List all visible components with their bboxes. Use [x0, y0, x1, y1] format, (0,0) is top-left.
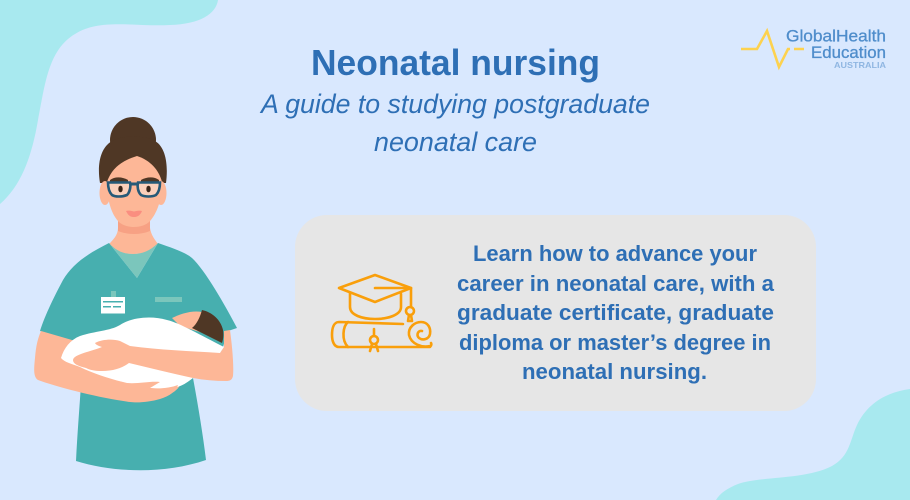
scrub body — [40, 243, 237, 470]
panel: career callout — [295, 215, 816, 411]
callout text: diploma or master’s degree in — [459, 330, 771, 355]
subtitle: A guide to studying postgraduate — [259, 89, 650, 119]
collar — [109, 243, 158, 278]
baby wrap — [61, 318, 224, 389]
baby face — [172, 311, 202, 332]
illustration: nurse holding baby — [34, 117, 237, 470]
subtitle: neonatal care — [374, 127, 537, 157]
ears — [100, 181, 110, 205]
logo: Global Health Education Australia: Education — [811, 43, 886, 62]
subtitle — [259, 89, 650, 157]
hair bun — [110, 117, 156, 163]
eyes — [118, 186, 123, 192]
name badge — [101, 291, 125, 314]
logo: Global Health Education Australia — [741, 26, 886, 70]
icon: graduation cap and diploma — [332, 275, 431, 351]
callout text: graduate certificate, graduate — [457, 300, 774, 325]
logo: Global Health Education Australia: GlobalHealth — [786, 26, 886, 46]
decorative blob: bottom right — [716, 389, 910, 500]
title: Neonatal nursing — [311, 42, 600, 83]
callout text: neonatal nursing. — [522, 359, 707, 384]
mouth — [126, 211, 142, 217]
decorative blob: top left — [0, 0, 218, 204]
face — [107, 156, 162, 227]
eyebrows — [110, 177, 159, 183]
baby hair — [192, 310, 223, 343]
far arm — [34, 331, 180, 402]
callout text — [457, 241, 775, 384]
callout text: career in neonatal care, with a — [457, 271, 775, 296]
hair — [99, 136, 167, 183]
glasses — [108, 182, 160, 196]
far hand — [127, 382, 178, 402]
pocket — [155, 297, 182, 302]
neck — [109, 215, 158, 254]
logo: Global Health Education Australia: AUSTRALIA — [834, 60, 886, 70]
callout text: Learn how to advance your — [473, 241, 757, 266]
near arm — [73, 330, 233, 381]
